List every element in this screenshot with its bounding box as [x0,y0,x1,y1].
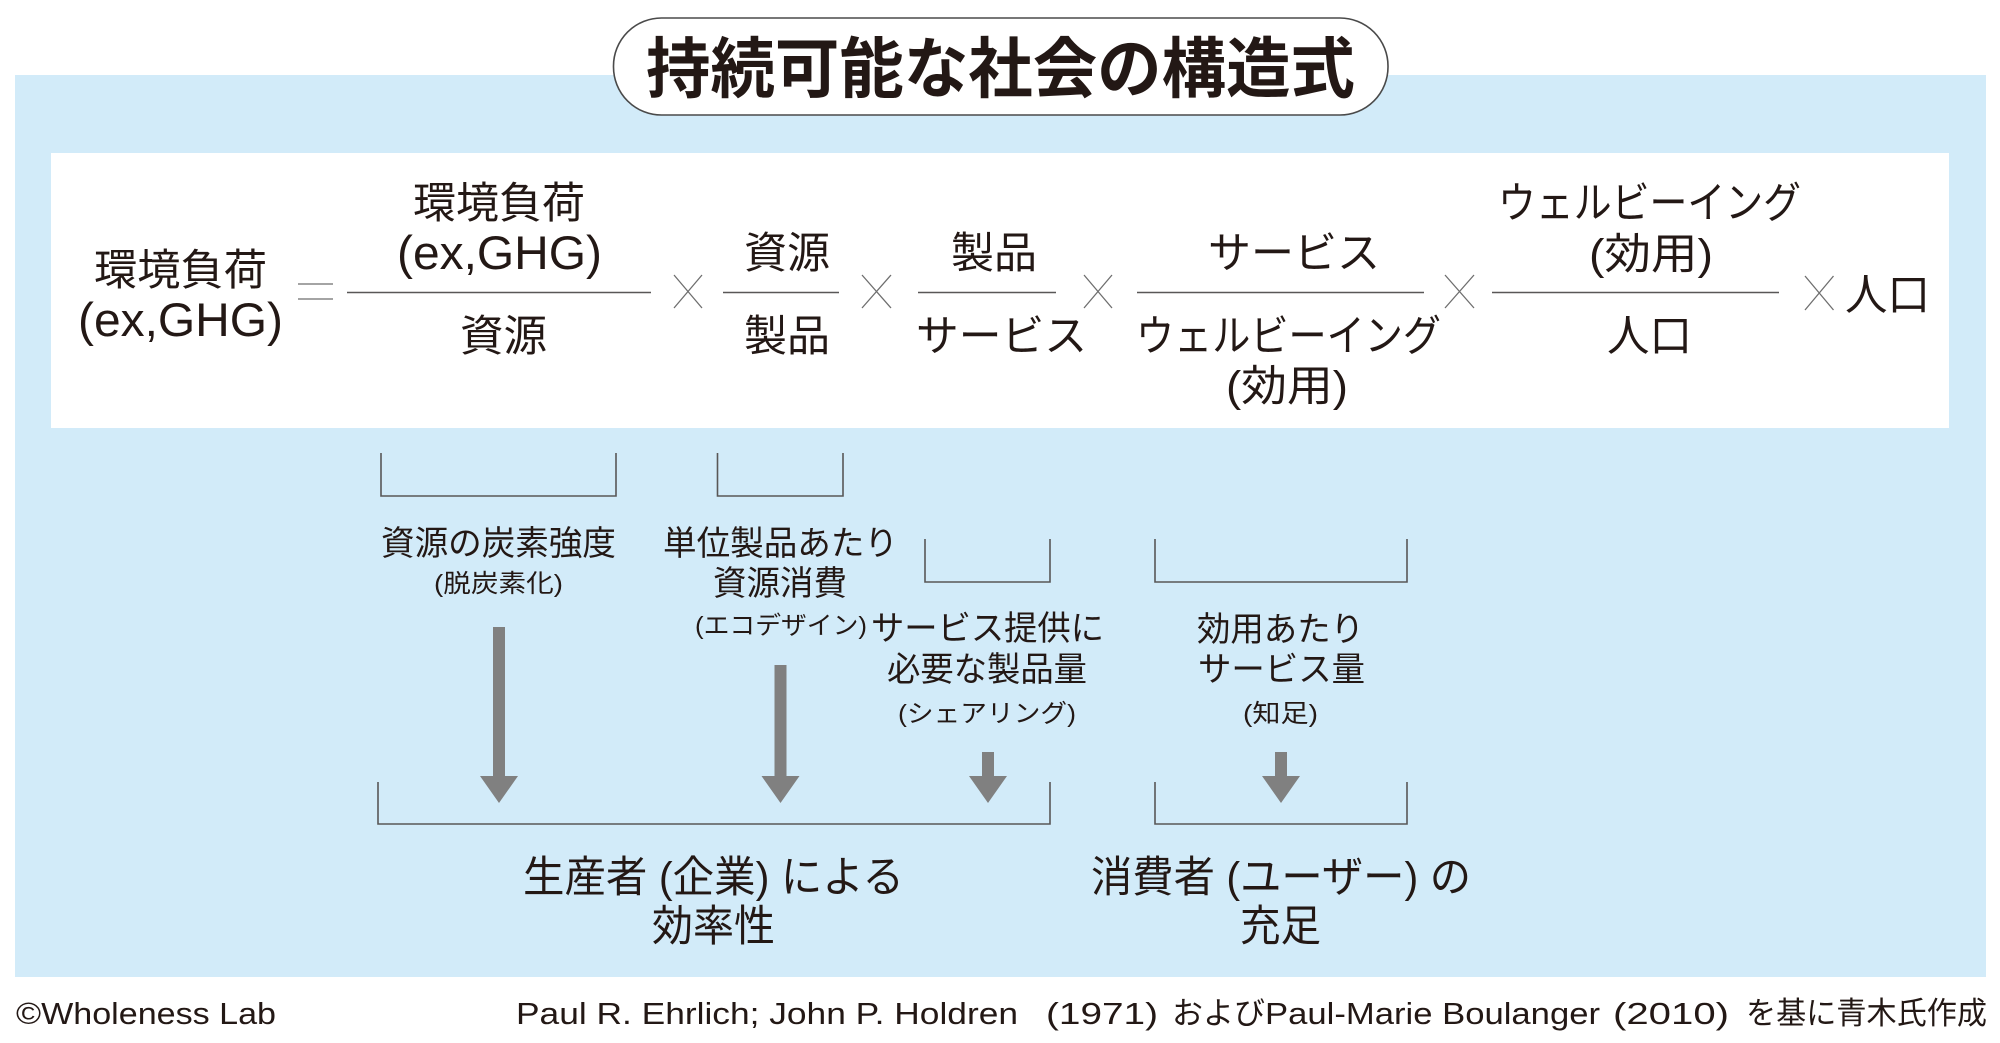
label: decarbonization: (脱炭素化) [434,570,563,598]
fraction 5: (効用) [1589,231,1713,279]
heading: producer efficiency: 生産者 (企業) による [523,854,904,902]
bracket: consumers [1155,782,1407,824]
label: sharing: 必要な製品量 [887,651,1087,689]
arrow 1 [480,627,518,803]
fraction 1: 資源 [460,313,547,361]
footer: source: Paul R. Ehrlich; John P. Holdren [516,996,1018,1031]
fraction 4: ウェルビーイング [1136,313,1441,361]
fraction 2 [723,230,839,361]
label: decarbonization: 資源の炭素強度 [381,525,616,563]
label: eco design [663,525,898,640]
fraction 4: サービス [1208,230,1380,278]
label: sharing [871,610,1104,728]
fraction 4: (効用) [1226,363,1348,411]
label: decarbonization [381,525,616,598]
footer: source: (1971) [1046,996,1158,1031]
left side: environmental load [78,247,283,346]
label: eco design: 単位製品あたり [663,525,898,563]
left side: environmental load: 環境負荷 [94,247,267,295]
panel: white formula box [51,153,1949,428]
fraction 4 [1136,230,1441,411]
footer: source: Paul-Marie Boulanger [1265,996,1600,1031]
label: sufficiency [1197,611,1365,728]
heading: producer efficiency [523,854,904,951]
bracket: resource per product [718,453,843,496]
multiply 2 [862,275,891,308]
multiply 4 [1445,275,1474,308]
multiply 1 [674,275,702,308]
footer: source: を基に青木氏作成 [1746,996,1987,1031]
bracket: product per service [925,539,1050,582]
heading: consumer sufficiency: 消費者 (ユーザー) の [1091,854,1471,902]
heading: producer efficiency: 効率性 [652,903,775,951]
heading: consumer sufficiency: 充足 [1240,903,1321,951]
fraction 1 [347,180,651,361]
label: sufficiency: (知足) [1243,700,1318,728]
bracket: producers [378,782,1050,824]
label: sufficiency: 効用あたり [1197,611,1364,649]
fraction 1: 環境負荷 [413,180,585,228]
fraction 3 [916,230,1087,361]
label: sharing: サービス提供に [871,610,1104,648]
bracket: service per utility [1155,539,1407,582]
arrow 2 [762,665,800,803]
fraction 2: 資源 [744,230,830,278]
population term: 人口 [1845,272,1930,320]
footer: source: (2010) [1613,996,1729,1031]
footer: source [516,996,1987,1031]
fraction 5: ウェルビーイング [1498,180,1801,228]
left side: environmental load: (ex,GHG) [78,293,283,346]
multiply 5 [1805,276,1834,310]
footer: source: および [1172,996,1265,1031]
footer: copyright: ©Wholeness Lab [16,996,276,1031]
arrow 3 [969,752,1007,803]
label: eco design: (エコデザイン) [695,612,867,640]
title pill: 持続可能な社会の構造式 [646,32,1355,106]
fraction 5 [1492,180,1801,361]
fraction 2: 製品 [744,313,830,361]
equals sign [298,284,333,299]
label: sharing: (シェアリング) [898,700,1076,728]
fraction 3: 製品 [951,230,1037,278]
bracket: resource carbon intensity [381,453,616,496]
fraction 1: (ex,GHG) [397,226,602,279]
fraction 5: 人口 [1607,313,1692,361]
arrow 4 [1262,752,1300,803]
label: eco design: 資源消費 [713,565,847,603]
label: sufficiency: サービス量 [1198,651,1365,689]
fraction 3: サービス [916,313,1087,361]
heading: consumer sufficiency [1091,854,1471,951]
multiply 3 [1084,275,1112,308]
